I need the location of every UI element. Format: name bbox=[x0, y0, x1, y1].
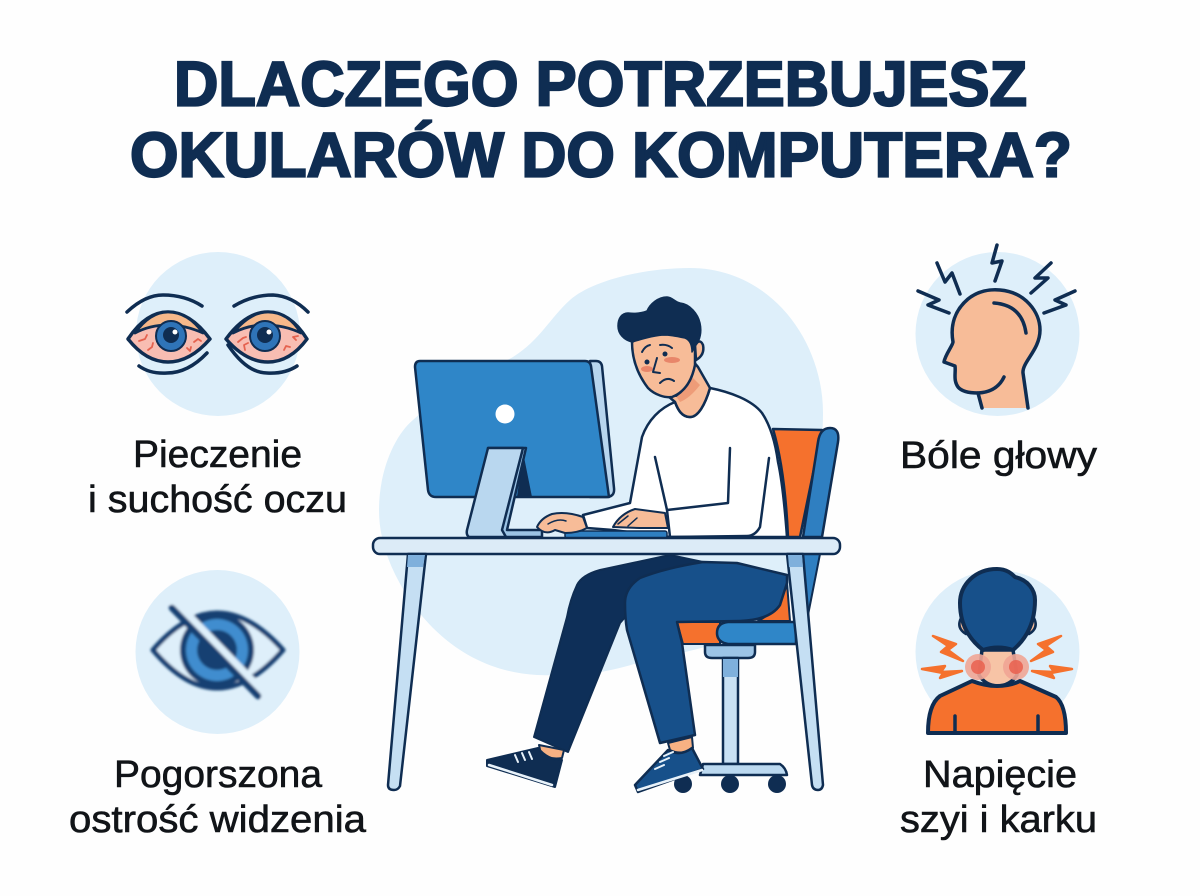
chair seat bbox=[674, 583, 796, 793]
desk bbox=[373, 538, 840, 554]
title: OKULARÓW DO KOMPUTERA? bbox=[130, 120, 1072, 190]
monitor bbox=[415, 361, 614, 537]
person torso bbox=[583, 388, 787, 537]
label: neck tension bbox=[900, 754, 1097, 841]
label: burning and dry eyes: i suchość oczu bbox=[88, 479, 347, 521]
background blob bbox=[379, 268, 823, 675]
panel: central illustration bbox=[373, 268, 840, 793]
icon: head with lightning bbox=[916, 245, 1080, 416]
title bbox=[130, 50, 1072, 190]
title: DLACZEGO POTRZEBUJESZ bbox=[174, 50, 1027, 120]
person head bbox=[618, 297, 710, 417]
label: blurred vision: ostrość widzenia bbox=[69, 799, 367, 841]
panel: neck tension bbox=[900, 569, 1097, 841]
icon: red dry eyes bbox=[127, 252, 308, 416]
panel: burning and dry eyes bbox=[88, 252, 347, 521]
label: burning and dry eyes bbox=[88, 434, 347, 521]
panel: blurred vision bbox=[69, 570, 367, 841]
desk legs bbox=[388, 554, 823, 790]
label: neck tension: szyi i karku bbox=[900, 799, 1097, 841]
person front leg bbox=[625, 562, 787, 792]
keyboard and hands bbox=[537, 509, 668, 538]
label: burning and dry eyes: Pieczenie bbox=[133, 434, 302, 476]
panel: headache bbox=[900, 245, 1097, 477]
label: neck tension: Napięcie bbox=[923, 754, 1077, 796]
label: blurred vision: Pogorszona bbox=[114, 754, 323, 796]
label: headache: Bóle głowy bbox=[900, 435, 1097, 477]
chair back bbox=[773, 428, 838, 620]
icon: neck pain from behind bbox=[916, 569, 1080, 734]
label: blurred vision bbox=[69, 754, 367, 841]
monitor logo dot bbox=[496, 404, 514, 424]
icon: blurred crossed eye bbox=[136, 570, 300, 734]
person back leg bbox=[487, 555, 703, 787]
